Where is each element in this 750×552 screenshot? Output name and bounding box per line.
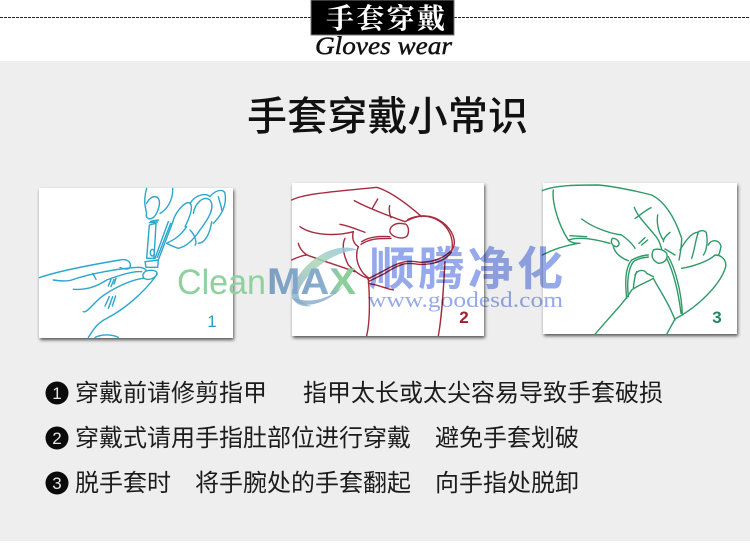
header banner	[0, 0, 750, 35]
panel 1: trim nails illustration	[39, 188, 233, 338]
watermark: CleanMAX logo: Clean	[177, 263, 266, 302]
tip 2: 避免手套划破	[435, 425, 579, 452]
English subtitle: Gloves wear	[315, 33, 452, 60]
tip 3: 脱手套时	[75, 470, 171, 497]
watermark: CleanMAX logo	[177, 248, 358, 306]
panel 3: removing glove illustration: 3	[712, 308, 722, 327]
tip 2: 2	[52, 429, 62, 448]
panel 1: trim nails illustration: 1	[207, 312, 217, 331]
tip 3: 向手指处脱卸	[435, 470, 579, 497]
tip 1: 穿戴前请修剪指甲	[75, 380, 267, 407]
tip 1: 指甲太长或太尖容易导致手套破损	[303, 380, 663, 407]
watermark: company name: 顺腾净化	[369, 243, 563, 295]
panel 2: glove fingertip illustration	[292, 183, 484, 336]
tip 2: 穿戴式请用手指肚部位进行穿戴	[75, 425, 411, 452]
panel 2: glove fingertip illustration: 2	[459, 308, 469, 327]
watermark: company name: www.goodesd.com	[368, 287, 563, 312]
tip 2	[46, 425, 579, 452]
tip 3: 将手腕处的手套翻起	[195, 470, 411, 497]
tip 1: 1	[52, 384, 62, 403]
panel 3: removing glove illustration	[542, 183, 737, 334]
header banner: 手套穿戴	[326, 2, 447, 35]
tip 1	[46, 380, 663, 407]
tip 3: 3	[52, 474, 62, 493]
watermark: CleanMAX logo: MAX	[267, 261, 356, 302]
main heading: 手套穿戴小常识	[247, 95, 528, 139]
tip 3	[46, 470, 579, 497]
